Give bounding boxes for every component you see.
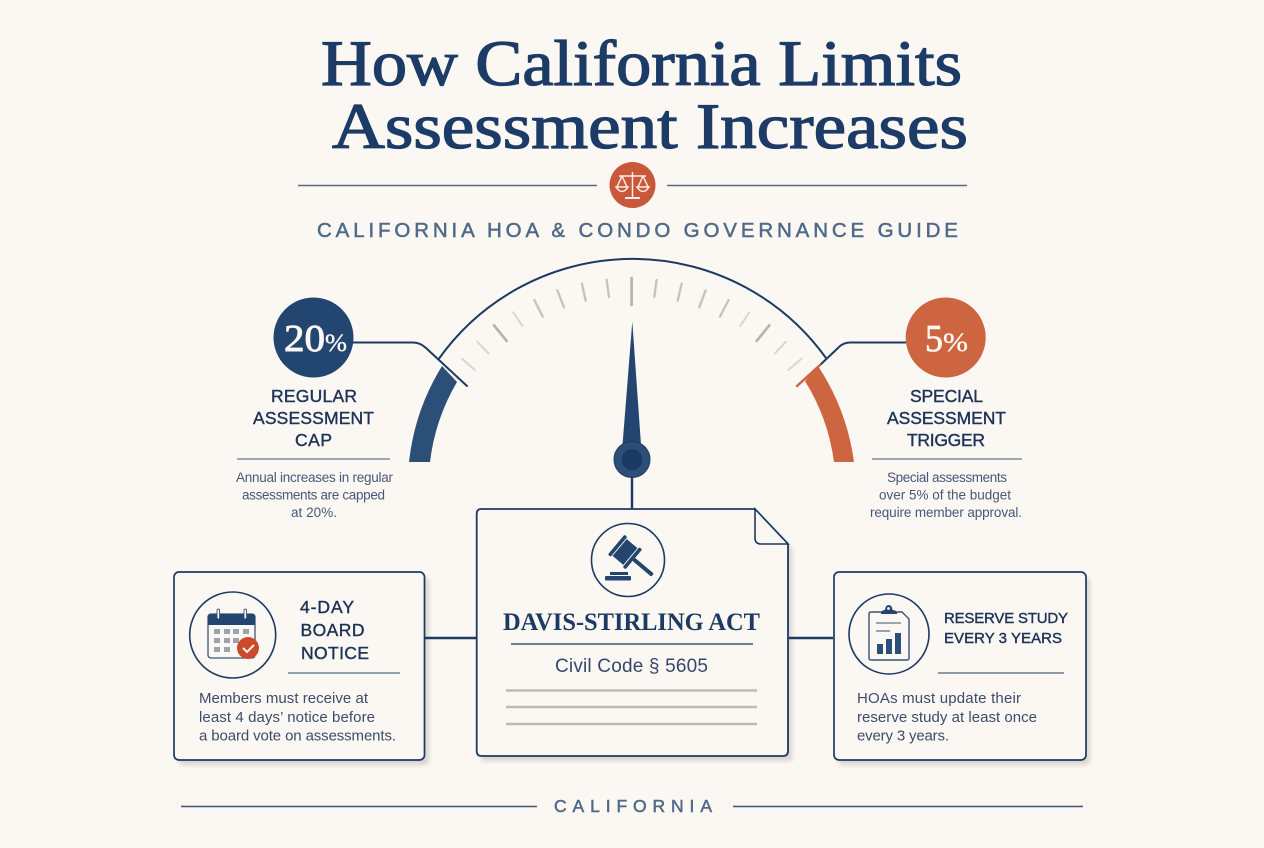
heading: ASSESSMENT (887, 408, 1006, 428)
heading: RESERVE STUDY (944, 610, 1068, 627)
badge: 20%: % (325, 330, 347, 357)
connector to 20% badge (353, 342, 467, 386)
heading: NOTICE (301, 643, 369, 663)
title (321, 28, 968, 163)
description: at 20%. (291, 505, 337, 520)
icon: gavel (592, 524, 664, 596)
description: Special assessments (887, 470, 1007, 485)
needle (614, 322, 650, 509)
title: Assessment Increases (332, 91, 968, 163)
heading: BOARD (300, 620, 364, 640)
heading: ASSESSMENT (253, 408, 374, 428)
connector left card to document (425, 637, 476, 639)
panel: regular assessment cap (236, 298, 394, 520)
description: HOAs must update their (857, 690, 1021, 707)
gauge ticks (462, 278, 802, 370)
heading: SPECIAL (910, 386, 983, 406)
connector document to right card (789, 637, 833, 639)
badge: 5% (906, 298, 986, 378)
title: How California Limits (321, 28, 962, 100)
heading (253, 386, 374, 450)
gauge (353, 259, 906, 509)
description: a board vote on assessments. (199, 728, 396, 744)
panel: davis-stirling act document (477, 509, 792, 761)
heading (944, 610, 1068, 647)
description: Annual increases in regular (236, 470, 394, 485)
badge: 5%: 5 (925, 318, 943, 360)
description: least 4 days’ notice before (199, 709, 375, 726)
subtitle: CALIFORNIA HOA & CONDO GOVERNANCE GUIDE (317, 219, 958, 242)
gauge arc (438, 259, 826, 360)
description: require member approval. (870, 505, 1022, 520)
heading: TRIGGER (907, 430, 985, 450)
heading: 4-DAY (300, 597, 354, 617)
description: every 3 years. (857, 728, 949, 744)
right gauge band (805, 366, 854, 462)
heading: CAP (295, 430, 332, 450)
footer: CALIFORNIA (554, 796, 712, 816)
panel: reserve study (834, 572, 1090, 765)
heading (887, 386, 1006, 450)
heading: EVERY 3 YEARS (944, 630, 1062, 647)
description (857, 690, 1037, 744)
connector to 5% badge (820, 342, 906, 365)
description: over 5% of the budget (879, 488, 1011, 502)
description (236, 470, 394, 520)
divider with scales badge (298, 162, 967, 208)
panel: special assessment trigger (870, 298, 1022, 520)
description: assessments are capped (242, 488, 385, 502)
description: Members must receive at (199, 690, 369, 707)
heading: REGULAR (271, 386, 357, 406)
panel: 4-day board notice (174, 572, 429, 765)
left gauge band (409, 366, 457, 462)
badge: 5%: % (943, 328, 968, 357)
heading: DAVIS-STIRLING ACT (503, 609, 760, 636)
description (199, 690, 396, 744)
description: reserve study at least once (857, 709, 1037, 726)
heading (300, 597, 369, 663)
badge: 20%: 20 (284, 318, 325, 360)
icon: clipboard with chart (849, 594, 929, 674)
description (870, 470, 1022, 520)
badge: 20% (274, 298, 354, 378)
icon: calendar (190, 592, 276, 678)
citation: Civil Code § 5605 (555, 656, 708, 677)
